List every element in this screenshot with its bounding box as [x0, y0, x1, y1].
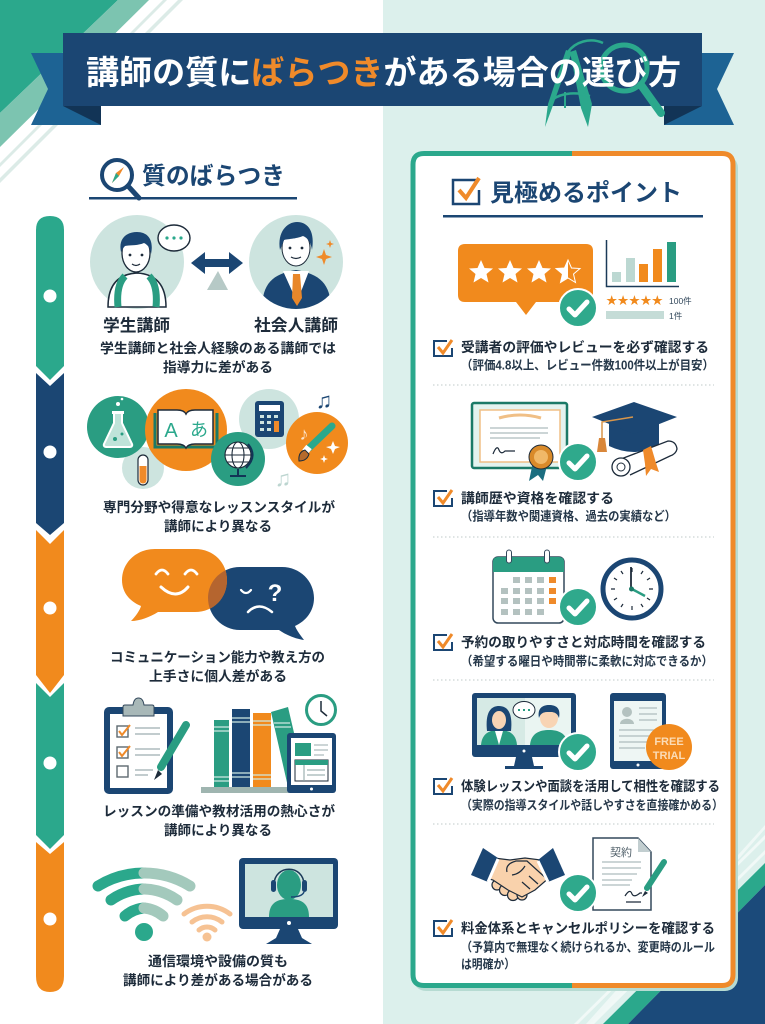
point heading: 講師歴や資格を確認する	[461, 490, 614, 506]
badge: free trial	[646, 724, 692, 770]
icon: open book circle: A	[164, 420, 178, 442]
checkbox	[434, 490, 452, 506]
point heading: 体験レッスンや面談を活用して相性を確認する	[461, 778, 720, 794]
checkbox	[434, 634, 452, 650]
point 5: pricing and cancellation	[434, 838, 715, 972]
icon: navy music note: ♫	[316, 388, 332, 413]
left section heading	[89, 160, 297, 200]
background: right pale panel	[383, 0, 765, 1024]
item: preparation and materials	[103, 696, 336, 838]
description: レッスンの準備や教材活用の熱心さが	[103, 803, 335, 819]
point detail: （評価4.8以上、レビュー件数100件以上が目安）	[461, 358, 714, 372]
legend: rating counts: 1件	[669, 311, 683, 321]
icon: clipboard with checklist	[104, 698, 186, 794]
point detail: （指導年数や関連資格、過去の実績など）	[461, 508, 676, 524]
icon: calculator circle	[239, 389, 299, 449]
panel: checkpoints card	[413, 154, 738, 991]
description	[103, 499, 335, 534]
icon: paintbrush circle	[286, 412, 348, 474]
point detail: （実際の指導スタイルや話しやすさを直接確かめる）	[461, 798, 723, 812]
description: コミュニケーション能力や教え方の	[110, 649, 325, 665]
icon: monitor with two people	[472, 693, 576, 769]
icon: calendar	[493, 550, 564, 623]
legend: rating counts: 100件	[669, 296, 692, 306]
item: subject icons	[87, 388, 348, 534]
point detail: は明確か）	[461, 956, 515, 972]
icon: large wifi	[98, 873, 190, 941]
icon: clock	[603, 560, 661, 618]
heading text: 見極めるポイント	[490, 180, 682, 207]
checkbox	[434, 778, 452, 794]
legend: rating counts	[606, 295, 692, 321]
icon: globe circle	[211, 432, 265, 486]
icon: compass and magnifier in banner	[545, 40, 661, 127]
banner body	[63, 33, 702, 106]
description: 専門分野や得意なレッスンスタイルが	[103, 499, 335, 515]
title text: 講師の質にばらつきがある場合の選び方	[86, 54, 681, 91]
icon: check badge	[559, 588, 597, 626]
description	[123, 953, 313, 988]
point 4: trial lesson	[434, 693, 723, 812]
icon: tablet profile	[610, 693, 666, 769]
icon: contract document	[593, 838, 664, 910]
description: 指導力に差がある	[163, 359, 273, 375]
icon: navy confused bubble	[208, 567, 314, 640]
icon: graduation cap and diploma	[592, 402, 677, 476]
description: 講師により差がある場合がある	[123, 972, 313, 988]
icon: large checkbox	[453, 178, 479, 204]
icon: flask circle	[87, 396, 149, 458]
icon: small wifi	[184, 906, 230, 942]
icon: books, clock and tablet	[201, 696, 336, 793]
icon: monitor with headset person	[239, 858, 338, 944]
icon: navy confused bubble: ?	[268, 580, 282, 607]
title banner	[31, 33, 734, 127]
icon: check badge	[559, 443, 597, 481]
description: 上手さに個人差がある	[149, 668, 287, 684]
icon: magnifier with compass needle	[102, 160, 139, 198]
item: communication bubbles	[110, 549, 325, 684]
point heading: 予約の取りやすさと対応時間を確認する	[461, 634, 706, 650]
point heading: 受講者の評価やレビューを必ず確認する	[461, 339, 709, 355]
decoration: top-left diagonal shapes	[0, 0, 183, 183]
icon: paintbrush circle: ♪	[300, 424, 308, 444]
icon: student teacher	[90, 215, 190, 309]
description	[110, 649, 325, 684]
checkbox	[434, 340, 452, 356]
point 2: qualifications	[434, 402, 677, 524]
icon: check badge	[559, 289, 597, 327]
timeline	[36, 216, 64, 992]
icon: double arrow on balance	[191, 252, 243, 290]
decoration: bottom-right diagonal shapes	[574, 825, 765, 1024]
icon: working teacher	[249, 215, 343, 310]
description	[100, 340, 336, 375]
icon: handshake	[471, 848, 565, 900]
icon: rating bubble	[458, 244, 593, 315]
point detail: （予算内で無理なく続けられるか、変更時のルール	[461, 940, 715, 954]
checkbox	[434, 920, 452, 936]
speech bubble	[158, 225, 190, 251]
icon: check badge	[559, 874, 597, 912]
icon: orange smile bubble	[122, 549, 227, 621]
icon: test tube circle	[122, 447, 164, 489]
icon: check badge	[559, 733, 597, 771]
description: 学生講師と社会人経験のある講師では	[100, 340, 336, 356]
badge: free trial: TRIAL	[653, 750, 685, 762]
icon: open book circle	[145, 389, 227, 471]
item: student vs working teacher	[90, 215, 343, 375]
description: 通信環境や設備の質も	[148, 953, 288, 969]
item: connection environment	[98, 858, 338, 988]
point heading: 料金体系とキャンセルポリシーを確認する	[461, 920, 715, 936]
legend: rating counts: ★★★★★	[606, 295, 663, 307]
description: 講師により異なる	[164, 518, 272, 534]
banner right tail	[664, 53, 734, 125]
point detail	[461, 940, 715, 972]
icon: pale music note: ♫	[275, 466, 291, 491]
banner left tail	[31, 53, 101, 125]
point 1: reviews	[434, 240, 714, 372]
card heading	[443, 178, 703, 218]
label: 社会人講師: 社会人講師	[254, 316, 338, 335]
icon: open book circle: あ	[190, 420, 208, 440]
point detail: （希望する曜日や時間帯に柔軟に対応できるか）	[461, 654, 713, 668]
label: 学生講師: 学生講師	[103, 315, 170, 335]
heading text: 質のばらつき	[142, 163, 285, 190]
icon: contract document: 契約	[610, 845, 632, 859]
chart: review bars	[606, 240, 679, 286]
description: 講師により異なる	[164, 822, 272, 838]
description	[103, 803, 335, 838]
badge: free trial: FREE	[654, 736, 684, 748]
card frame	[413, 154, 738, 991]
point 3: booking	[434, 550, 713, 668]
icon: certificate	[472, 403, 567, 481]
